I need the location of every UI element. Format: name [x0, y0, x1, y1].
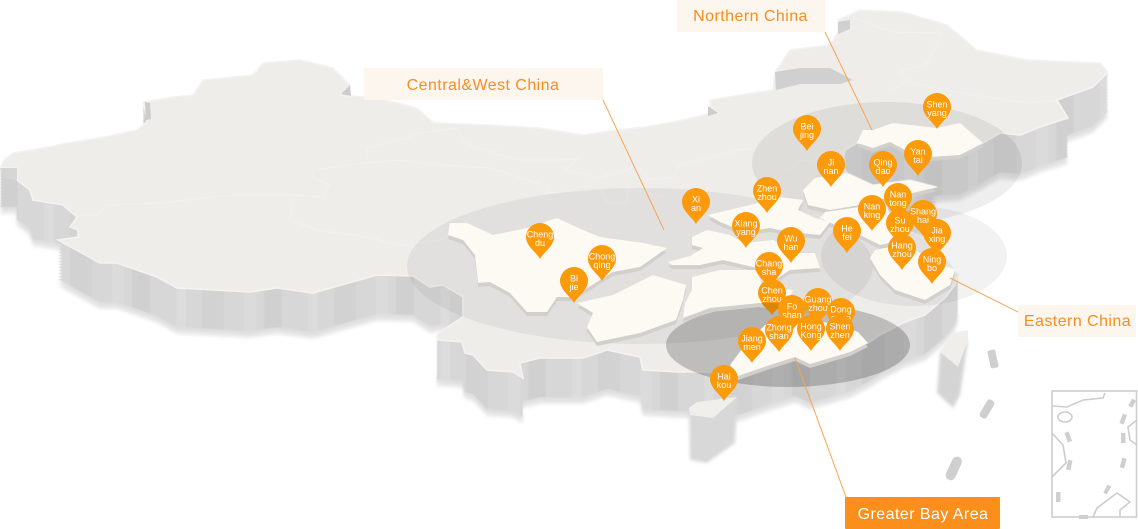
pin: Jinan: [817, 151, 845, 187]
pin: Xiangyang: yang: [736, 227, 756, 237]
pin: Changsha: [755, 252, 783, 288]
region ellipse: Central and West China: [407, 188, 873, 344]
leader line: Greater Bay Area: [795, 358, 846, 497]
pin: Bijie: [560, 267, 588, 303]
pin: Nantong: tong: [889, 198, 907, 208]
pin: Qingdao: Qing: [873, 157, 893, 167]
pin: Jiaxing: xing: [929, 234, 945, 244]
pin: Dongguan: [827, 298, 855, 334]
pin: Jiaxing: [923, 219, 951, 255]
pin: Shanghai: [909, 200, 937, 236]
label: Northern China: [677, 0, 825, 32]
label: Eastern China: Eastern China: [1024, 313, 1131, 330]
pin: Wuhan: han: [783, 242, 799, 252]
region ellipse: Greater Bay Area: [666, 303, 910, 387]
label: Greater Bay Area: Greater Bay Area: [858, 506, 988, 523]
pin: Dongguan: Dong: [830, 304, 852, 314]
pin: Foshan: Fo: [787, 301, 797, 311]
pin: Ningbo: bo: [927, 263, 937, 273]
pin: Jinan: nan: [823, 166, 839, 176]
pin: Shenzhen: Shen: [829, 321, 851, 331]
pin: Qingdao: dao: [875, 166, 891, 176]
highlighted provinces: [448, 123, 983, 380]
pin: Chengdu: [526, 223, 554, 259]
leader line: Central and West China: [603, 100, 664, 230]
label: Greater Bay Area: [845, 497, 1000, 529]
pin: Shenyang: yang: [927, 108, 947, 118]
pin: Shanghai: Shang: [910, 206, 936, 216]
pin: Qingdao: [869, 151, 897, 187]
pin: Hong Kong: Hong: [800, 321, 822, 331]
pin: Shanghai: hai: [917, 215, 929, 225]
pin: Hong Kong: [797, 315, 825, 351]
pin: Guangzhou: Guang: [804, 294, 832, 304]
pin: Ningbo: Ning: [923, 254, 941, 264]
pin: Chongqing: [588, 245, 616, 281]
pin: Foshan: [778, 295, 806, 331]
island: Hainan: [689, 397, 737, 463]
pin: Hong Kong: Kong: [800, 330, 822, 340]
pin: Yantai: tai: [913, 155, 923, 165]
pin: Chongqing: Chong: [589, 251, 615, 261]
pin: Suzhou: zhou: [890, 224, 910, 234]
pin: Bijie: jie: [568, 282, 579, 292]
South China Sea dashes: [944, 349, 999, 482]
pin: Haikou: kou: [717, 380, 731, 390]
pin: Zhongshan: Zhong: [766, 322, 792, 332]
pin: Chenzhou: [758, 279, 786, 315]
pin: Foshan: shan: [782, 310, 802, 320]
pin: Suzhou: [886, 209, 914, 245]
pin: Guangzhou: zhou: [808, 303, 828, 313]
pin: Wuhan: [777, 227, 805, 263]
pin: Haikou: [710, 365, 738, 401]
pin: Hefei: He: [841, 223, 853, 233]
pin: Dongguan: guan: [831, 313, 851, 323]
pin: Zhongshan: shan: [769, 331, 789, 341]
label: Central and West China: [364, 68, 603, 100]
pin: Hangzhou: Hang: [891, 240, 913, 250]
map: extruded side walls of China: [0, 13, 1108, 424]
pin: Hefei: [833, 217, 861, 253]
label: Northern China: Northern China: [693, 8, 808, 25]
pin: Zhongshan: [765, 316, 793, 352]
region ellipse: Northern China: [752, 102, 1022, 224]
pin: Chengdu: du: [535, 238, 545, 248]
pin: Chengdu: Cheng: [527, 229, 553, 239]
inset map: South China Sea: [1052, 391, 1137, 519]
island: Taiwan: [937, 330, 968, 408]
pin: Beijing: Bei: [800, 121, 814, 131]
map: top surface of China: [0, 10, 1108, 378]
pin: Jiangmen: men: [743, 342, 761, 352]
pin: Changsha: Chang: [756, 258, 782, 268]
pin: Shenzhen: [826, 315, 854, 351]
pin: Nantong: Nan: [890, 189, 906, 199]
pin: Zhenzhou: Zhen: [757, 183, 777, 193]
label: Eastern China: [1018, 305, 1136, 337]
pin: Chenzhou: zhou: [762, 294, 782, 304]
pin: Xi'an: an: [691, 203, 701, 213]
pin: Changsha: sha: [762, 267, 776, 277]
pin: Haikou: Hai: [717, 371, 731, 381]
pin: Yantai: [904, 140, 932, 176]
pin: Nanjing: king: [864, 210, 880, 220]
pin: Hangzhou: zhou: [892, 249, 912, 259]
pin: Nanjing: [858, 195, 886, 231]
leader line: Eastern China: [950, 278, 1018, 312]
pin: Chenzhou: Chen: [761, 285, 783, 295]
pin: Hangzhou: [888, 234, 916, 270]
pin: Jiangmen: [738, 327, 766, 363]
pin: Nanjing: Nan: [864, 201, 880, 211]
pin: Jiaxing: Jia: [931, 225, 943, 235]
label: Central and West China: Central&West China: [407, 77, 559, 94]
pin: Xi'an: Xi: [692, 194, 700, 204]
pin: Xi'an: [682, 188, 710, 224]
pin: Guangzhou: [804, 288, 832, 324]
pin: Wuhan: Wu: [784, 233, 798, 243]
pin: Xiangyang: [732, 212, 760, 248]
map: province border lines: [77, 18, 1057, 245]
pin: Xiangyang: Xiang: [734, 218, 758, 228]
pin: Shenyang: Shen: [926, 99, 948, 109]
pin: Bijie: Bi: [570, 273, 578, 283]
region ellipse: Eastern China: [821, 206, 1007, 306]
pin: Shenyang: [923, 93, 951, 129]
pin: Ningbo: [918, 248, 946, 284]
pin: Yantai: Yan: [910, 146, 926, 156]
leader line: Northern China: [825, 32, 872, 130]
pin: Jinan: Ji: [828, 157, 834, 167]
pin: Beijing: [793, 115, 821, 151]
pin: Suzhou: Su: [894, 215, 906, 225]
pin: Shenzhen: zhen: [830, 330, 850, 340]
pin: Beijing: jing: [799, 130, 814, 140]
pin: Zhenzhou: [753, 177, 781, 213]
pin: Zhenzhou: zhou: [757, 192, 777, 202]
pin: Hefei: fei: [842, 232, 852, 242]
pin: Jiangmen: Jiang: [741, 333, 763, 343]
pin: Chongqing: qing: [593, 260, 611, 270]
pin: Nantong: [884, 183, 912, 219]
